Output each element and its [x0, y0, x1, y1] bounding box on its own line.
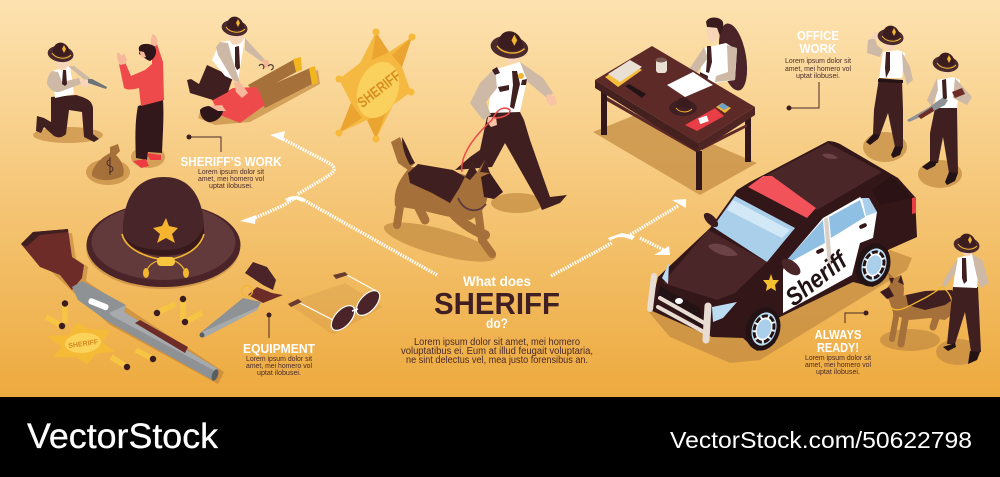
title and central text: SHERIFF	[434, 286, 560, 321]
text block: always ready: uptat ilobusei.	[816, 369, 860, 376]
grille and bumper	[657, 286, 702, 328]
white door panel	[783, 197, 877, 313]
connector: office work	[786, 82, 819, 110]
scene: sheriff holding shotgun	[907, 53, 972, 188]
scene: sheriff saluting	[863, 26, 913, 162]
icon: money bag	[86, 144, 130, 185]
footer watermark bar: VectorStock	[27, 417, 219, 456]
title and central text: Lorem ipsum dolor sit amet, mei homero	[414, 337, 580, 348]
desktop	[595, 46, 755, 143]
shirt	[953, 254, 979, 288]
icon: sheriff hat	[86, 177, 240, 289]
text block: always ready: Lorem ipsum dolor sit	[805, 355, 871, 362]
rear wheel	[850, 239, 896, 291]
mirrors	[701, 210, 721, 230]
text block: office work: WORK	[800, 41, 837, 56]
title and central text: voluptatibus ei. Eum at illud feugait voluptaria,	[401, 346, 593, 357]
door text: Sheriff	[780, 245, 854, 312]
connector: always ready	[845, 310, 868, 323]
scene: kneeling sheriff aiming pistol	[33, 43, 107, 143]
icon: small badge: SHERIFF	[68, 339, 99, 350]
text block: office work: uptat ilobusei.	[796, 73, 840, 80]
footer watermark bar	[0, 397, 1000, 477]
sheriff legs	[455, 112, 567, 210]
text block: equipment: Lorem ipsum dolor sit	[246, 356, 312, 363]
text block: always ready: READY!	[817, 340, 859, 355]
desk legs and rails	[601, 89, 751, 190]
icon: bullets	[46, 296, 202, 370]
legs	[947, 287, 981, 352]
text block: equipment: uptat ilobusei.	[257, 370, 301, 377]
connector: equipment	[266, 312, 272, 338]
text block: sheriff's work: SHERIFF’S WORK	[180, 154, 282, 169]
text block: always ready: ALWAYS	[814, 327, 862, 342]
text block: office work: amet, mei homero vol	[785, 66, 851, 73]
scene: sheriff with dog on leash	[880, 234, 989, 365]
patrol car	[647, 141, 917, 363]
text block: equipment	[243, 341, 315, 377]
text block: always ready	[805, 327, 871, 376]
text block: sheriff's work: uptat ilobusei.	[209, 183, 253, 190]
icon: large sheriff star	[336, 28, 416, 142]
title and central text: do?	[486, 315, 508, 331]
light bar	[748, 176, 816, 218]
title and central text: What does	[463, 273, 531, 289]
text block: always ready: amet, mei homero vol	[805, 362, 871, 369]
seated officer	[700, 43, 737, 83]
icon: large sheriff star: SHERIFF	[354, 67, 404, 111]
text block: sheriff's work: Lorem ipsum dolor sit	[198, 169, 264, 176]
rear quarter panel	[872, 176, 912, 205]
icon: small badge	[47, 323, 115, 364]
dotted flow arrows	[240, 131, 686, 276]
windshield	[713, 196, 795, 262]
text block: office work: Lorem ipsum dolor sit	[785, 58, 851, 65]
scene: sheriff walking police dog	[381, 31, 567, 270]
headlights	[662, 263, 737, 322]
text block: sheriff's work	[180, 154, 282, 190]
title and central text: ne sint delectus vel, mea justo forensibus an.	[406, 355, 588, 366]
door star	[763, 274, 779, 291]
standing dog	[892, 312, 938, 344]
roof	[767, 143, 882, 210]
text block: equipment: amet, mei homero vol	[246, 363, 312, 370]
text block: office work	[785, 28, 851, 80]
text block: office work: OFFICE	[797, 28, 839, 43]
scene: suspect with raised hands	[117, 34, 165, 168]
desk items	[605, 62, 642, 87]
icon: revolver	[200, 262, 283, 338]
leash	[890, 287, 953, 310]
front wheel	[740, 303, 786, 355]
scene: office desk	[593, 18, 757, 195]
icon: sunglasses	[287, 272, 384, 335]
scene: sheriff handcuffing suspect on the ground	[187, 17, 320, 125]
police dog	[391, 137, 415, 170]
car body	[650, 141, 917, 351]
tail light	[912, 197, 916, 214]
car shadow	[647, 250, 912, 363]
sheriff shirt and arms	[488, 62, 527, 113]
footer watermark bar: VectorStock.com/50622798	[670, 427, 972, 453]
red leash	[462, 108, 510, 172]
connector: sheriff's work	[186, 134, 221, 152]
text block: sheriff's work: amet, mei homero vol	[198, 176, 264, 183]
title and central text	[401, 273, 593, 366]
icon: shotgun	[21, 229, 224, 384]
text block: equipment: EQUIPMENT	[243, 341, 315, 356]
hood	[663, 230, 767, 300]
